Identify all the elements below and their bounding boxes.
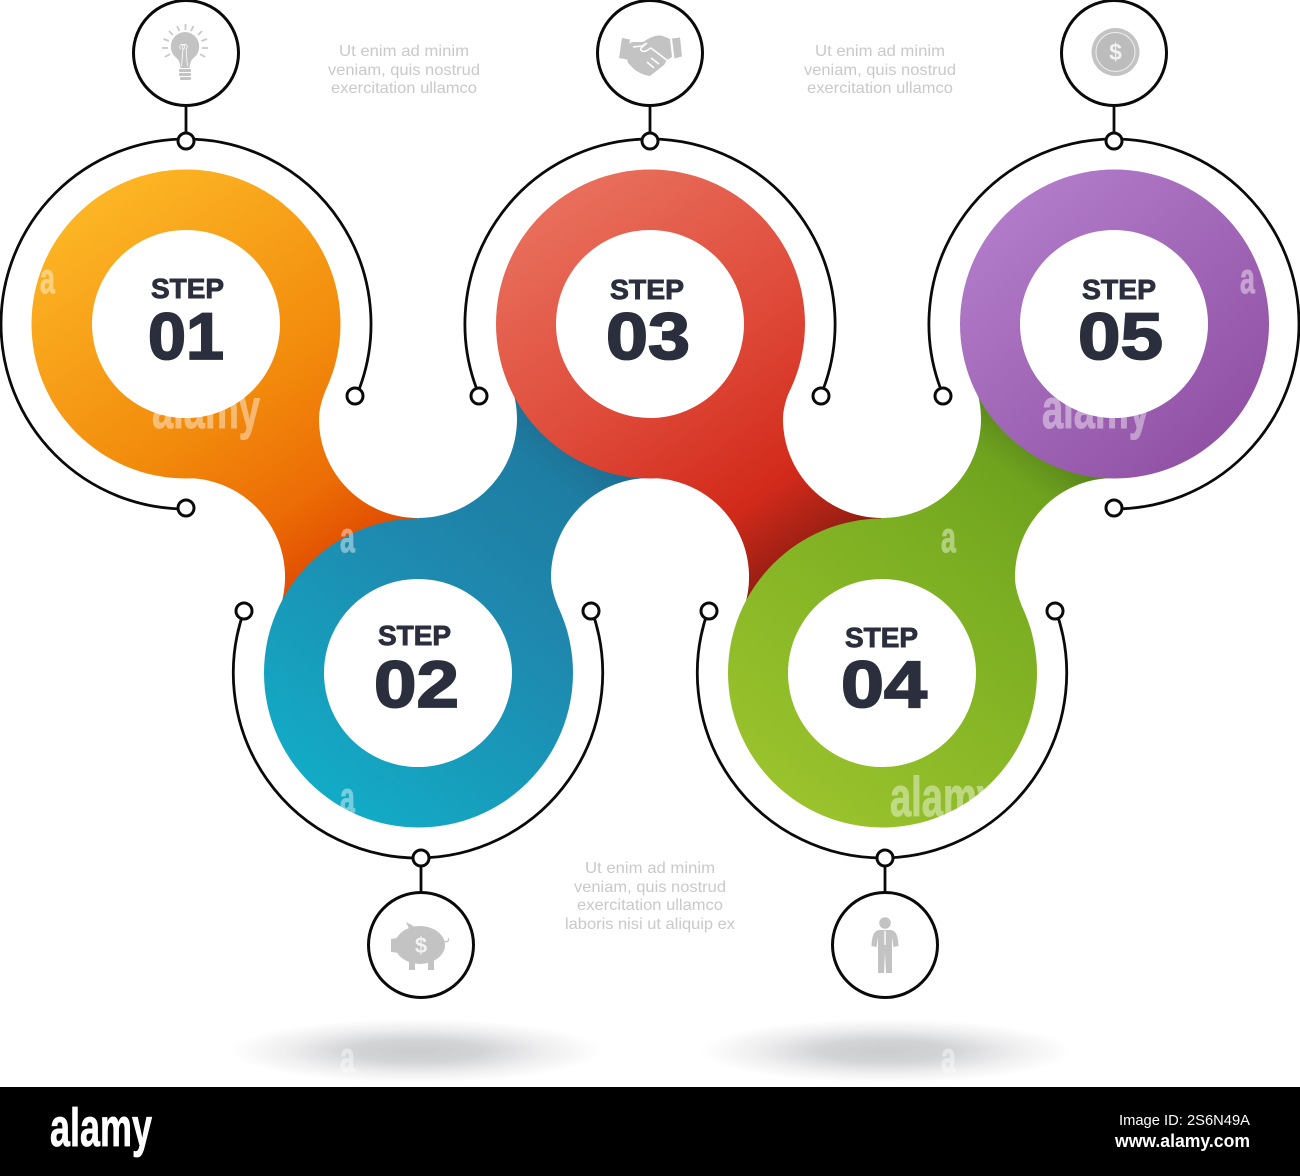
label: step 05: STEP [1082,274,1156,305]
step 01 orange shape [32,170,418,615]
label: step 03: 03 [606,299,690,373]
outline arcs step 03 [465,0,835,404]
watermark letters: alamy [152,377,260,440]
caption top left: Ut enim ad minim [339,43,469,60]
footer bar: alamy [50,1098,152,1158]
watermark letters: a [1240,255,1256,303]
label: step 02: STEP [378,620,451,651]
outline arcs step 04 [697,603,1067,998]
caption top right: Ut enim ad minim [815,43,945,60]
inner circle step 03 [556,230,744,418]
label: step 02: 02 [374,647,459,721]
label: step 04: 04 [841,647,927,721]
caption top left: veniam, quis nostrud [328,62,480,79]
step 02 blue shape [264,382,650,828]
caption bottom center: laboris nisi ut aliquip ex [565,916,735,933]
label: step 03 [606,274,690,373]
icon: piggy bank [391,922,449,970]
label: step 05 [1078,274,1163,373]
step 03 red shape [496,170,882,615]
footer bar: Image ID: 2S6N49A [1119,1112,1250,1129]
inner circle step 05 [1020,230,1208,418]
caption top right: veniam, quis nostrud [804,62,956,79]
outline arcs step 01 [1,0,371,516]
caption top left: exercitation ullamco [331,80,477,97]
footer bar: www.alamy.com [1114,1131,1250,1151]
footer bar [0,1087,1300,1176]
watermark letters: a [941,1034,957,1082]
icon: dollar coin: $ [1109,39,1122,65]
label: step 01: 01 [148,299,224,373]
watermark letters [40,255,1256,1082]
watermark letters: alamy [890,765,998,828]
label: step 04 [841,622,927,721]
icon: light bulb [162,24,208,80]
inner circle step 04 [788,579,976,767]
watermark letters: a [340,774,356,822]
icon: dollar coin [1092,28,1140,76]
inner circle step 02 [324,579,512,767]
watermark letters: a [941,514,957,562]
caption top left [328,43,480,97]
watermark letters: a [340,1034,356,1082]
icon: businessman [872,917,898,973]
caption top right [804,43,956,97]
step 04 green shape [728,382,1114,828]
outline arcs step 05 [929,0,1299,516]
caption bottom center: Ut enim ad minim [585,860,715,877]
caption bottom center [565,860,735,933]
outline arcs step 02 [233,603,603,998]
label: step 04: STEP [845,622,918,653]
label: step 01: STEP [151,273,224,304]
inner circle step 01 [92,230,280,418]
watermark letters: a [340,514,356,562]
watermark letters: a [40,255,56,303]
caption top right: exercitation ullamco [807,80,953,97]
icon: piggy bank: $ [415,933,427,958]
caption bottom center: veniam, quis nostrud [574,879,726,896]
step 05 purple shape [960,170,1269,478]
label: step 05: 05 [1078,299,1163,373]
caption bottom center: exercitation ullamco [577,897,723,914]
floor shadow right [700,1019,1072,1083]
watermark letters: alamy [1042,377,1150,440]
floor shadow left [230,1019,602,1083]
icon: handshake [619,35,682,76]
label: step 02 [374,620,459,721]
label: step 03: STEP [610,274,684,305]
